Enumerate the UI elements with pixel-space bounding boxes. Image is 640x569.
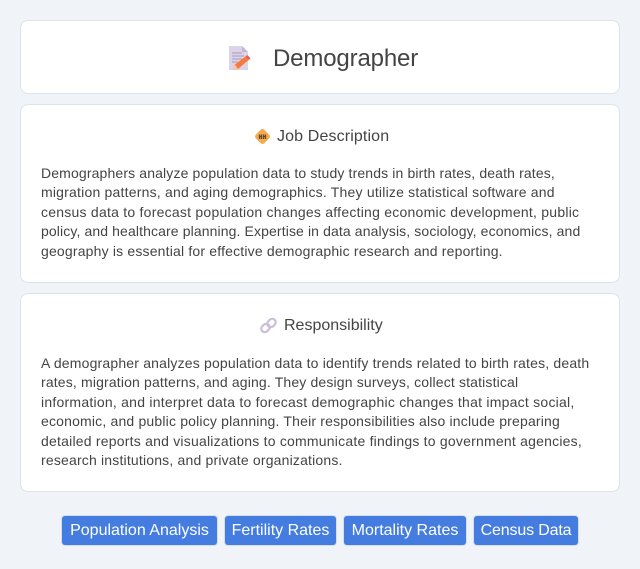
text block: responsibility: information, and interpret data to forecast demographic changes that impact social, — [41, 394, 575, 410]
panel: title card — [20, 20, 620, 94]
heading: job description: Job Description — [277, 128, 389, 145]
text block: responsibility — [41, 355, 589, 468]
title: Demographer — [273, 45, 418, 72]
tag: mortality rates: Mortality Rates — [352, 522, 458, 539]
text block: job description: migration patterns, and aging demographics. They utilize statistical software and — [41, 184, 555, 200]
tag: fertility rates: Fertility Rates — [232, 522, 329, 539]
text block: responsibility: A demographer analyzes population data to identify trends related to birth rates, death — [41, 355, 589, 371]
tag: population analysis — [62, 516, 217, 545]
tag: population analysis: Population Analysis — [70, 522, 209, 539]
text block: responsibility: rates, migration patterns, and aging. They design surveys, collect statistical — [41, 374, 518, 390]
text block: job description — [41, 165, 580, 259]
text block: responsibility: research institutions, and private organizations. — [41, 452, 343, 468]
text block: job description: geography is essential for effective demographic research and reporting. — [41, 243, 503, 259]
tag: fertility rates — [225, 516, 336, 545]
icon: orange diamond sign — [255, 129, 270, 144]
tag: census data — [474, 516, 578, 545]
tag: mortality rates — [344, 516, 466, 545]
panel: responsibility — [20, 293, 620, 492]
heading: responsibility: Responsibility — [284, 317, 383, 334]
icon: chain link — [260, 318, 277, 334]
text block: responsibility: detailed reports and visualizations to communicate findings to government agencies, — [41, 433, 582, 449]
text block: responsibility: economic, and public policy planning. Their responsibilities also include preparing — [41, 413, 560, 429]
icon: document with pencil — [229, 46, 250, 70]
panel: job description — [20, 104, 620, 283]
text block: job description: policy, and healthcare planning. Expertise in data analysis, sociology, economics, and — [41, 223, 580, 239]
text block: job description: census data to forecast population changes affecting economic development, public — [41, 204, 579, 220]
tag: census data: Census Data — [481, 522, 571, 539]
text block: job description: Demographers analyze population data to study trends in birth rates, death rates, — [41, 165, 555, 181]
